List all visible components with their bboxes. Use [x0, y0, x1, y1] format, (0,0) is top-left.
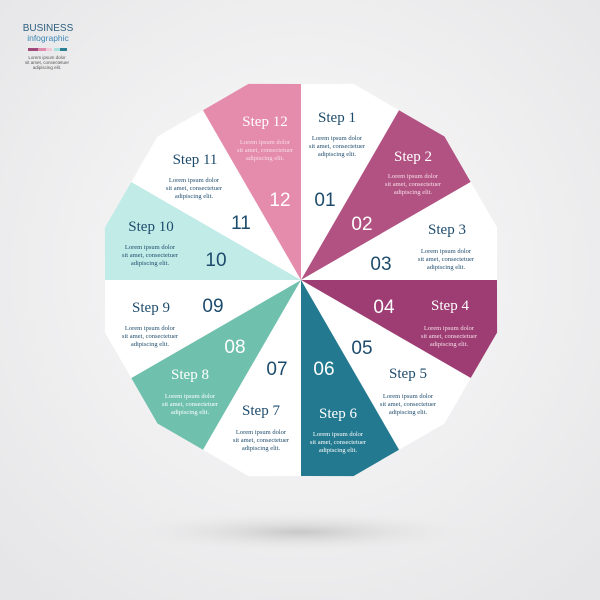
step texts: Step 12 [242, 114, 288, 130]
step texts: Lorem ipsum dolor [169, 177, 220, 184]
step texts: sit amet, consectetuer [162, 401, 219, 408]
wedge 5 [301, 280, 471, 450]
step texts: Step 2 [394, 149, 432, 165]
header: BUSINESS [23, 23, 74, 34]
step texts: Step 4 [431, 298, 469, 314]
wedge 2 [301, 110, 471, 280]
step texts: adipiscing elit. [389, 409, 428, 416]
step texts: Lorem ipsum dolor [165, 393, 216, 400]
step texts: 09 [202, 296, 224, 317]
step texts: Step 1 [318, 110, 356, 126]
step texts: adipiscing elit. [394, 189, 433, 196]
wedge 9 [105, 280, 301, 378]
step texts: Step 10 [128, 219, 174, 235]
step texts: 01 [314, 190, 336, 211]
step texts: adipiscing elit. [430, 341, 469, 348]
step texts: sit amet, consectetuer [122, 252, 179, 259]
header [23, 23, 74, 70]
step texts: Step 8 [171, 367, 209, 383]
header: adipiscing elit. [33, 65, 61, 70]
step texts: Lorem ipsum dolor [240, 139, 291, 146]
step texts: adipiscing elit. [246, 155, 285, 162]
step texts: sit amet, consectetuer [310, 439, 367, 446]
step texts: sit amet, consectetuer [418, 256, 475, 263]
wedge 12 [203, 84, 301, 280]
step texts: Step 6 [319, 406, 357, 422]
step texts: Lorem ipsum dolor [383, 393, 434, 400]
step texts: sit amet, consectetuer [421, 333, 478, 340]
step texts: adipiscing elit. [131, 260, 170, 267]
step texts: sit amet, consectetuer [380, 401, 437, 408]
step texts: sit amet, consectetuer [233, 437, 290, 444]
wedge 10 [105, 182, 301, 280]
step texts: adipiscing elit. [175, 193, 214, 200]
step texts: Lorem ipsum dolor [421, 248, 472, 255]
step texts: 02 [351, 214, 373, 235]
step texts: Lorem ipsum dolor [424, 325, 475, 332]
step texts: Lorem ipsum dolor [125, 244, 176, 251]
step texts: Step 7 [242, 403, 280, 419]
step texts: Lorem ipsum dolor [388, 173, 439, 180]
step texts: Lorem ipsum dolor [312, 135, 363, 142]
wedge 4 [301, 280, 497, 378]
header: infographic [27, 33, 70, 43]
shadow [110, 510, 490, 554]
step texts: sit amet, consectetuer [122, 333, 179, 340]
step texts: Lorem ipsum dolor [313, 431, 364, 438]
step texts: adipiscing elit. [319, 447, 358, 454]
wedge 11 [131, 110, 301, 280]
header: sit amet, consectetuer [25, 60, 70, 65]
wedge 1 [301, 84, 399, 280]
step texts: sit amet, consectetuer [237, 147, 294, 154]
wedge 7 [203, 280, 301, 476]
step texts: 11 [231, 213, 251, 234]
header: Lorem ipsum dolor [28, 55, 66, 60]
step texts: 06 [313, 359, 335, 380]
step texts: adipiscing elit. [131, 341, 170, 348]
step texts: Step 5 [389, 366, 427, 382]
step texts: sit amet, consectetuer [309, 143, 366, 150]
step texts [122, 110, 478, 454]
wedge 6 [301, 280, 399, 476]
step texts: adipiscing elit. [318, 151, 357, 158]
wedge 8 [131, 280, 301, 450]
step texts: 04 [373, 297, 395, 318]
step texts: sit amet, consectetuer [385, 181, 442, 188]
step texts: 10 [205, 250, 227, 271]
step texts: Step 9 [132, 300, 170, 316]
step texts: 05 [351, 338, 373, 359]
step texts: adipiscing elit. [171, 409, 210, 416]
wedge 3 [301, 182, 497, 280]
step texts: 08 [224, 337, 246, 358]
step texts: 07 [266, 359, 288, 380]
step texts: adipiscing elit. [242, 445, 281, 452]
step texts: 12 [269, 190, 291, 211]
step texts: Step 3 [428, 222, 466, 238]
step texts: Lorem ipsum dolor [125, 325, 176, 332]
step texts: Step 11 [173, 152, 217, 168]
wheel [105, 84, 497, 476]
step texts: sit amet, consectetuer [166, 185, 223, 192]
step texts: adipiscing elit. [427, 264, 466, 271]
step texts: 03 [370, 254, 392, 275]
step texts: Lorem ipsum dolor [236, 429, 287, 436]
